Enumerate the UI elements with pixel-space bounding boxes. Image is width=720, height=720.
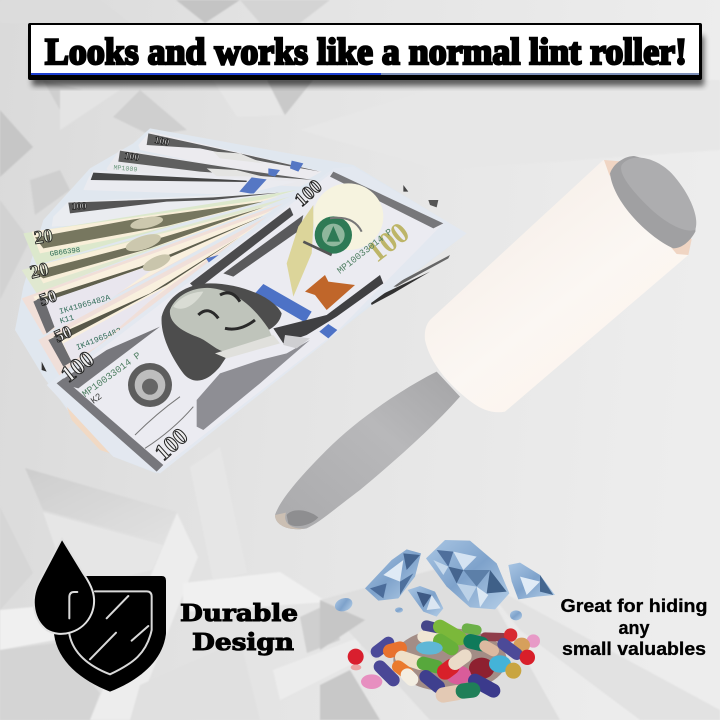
lint roller <box>275 156 696 529</box>
large diamond <box>426 540 509 609</box>
$50 bill 2: 50 <box>51 322 75 346</box>
back $100 bill 4 <box>52 192 293 227</box>
coat <box>197 340 310 430</box>
title banner <box>28 23 704 86</box>
$50 bill 2 <box>38 217 267 377</box>
back $100 bill 4: 100 <box>72 201 87 212</box>
caption: great for hiding any small valuables <box>560 596 708 659</box>
paper stack behind the bills <box>15 128 467 473</box>
shield <box>54 576 166 692</box>
caption: great for hiding any small valuables: any <box>618 618 650 638</box>
$20 bill 1: 20 <box>32 225 54 249</box>
label: durable design <box>180 600 298 656</box>
$20 bill 2: 20 <box>28 259 51 284</box>
label: durable design: Durable <box>180 600 298 627</box>
left diamond <box>365 549 421 601</box>
sticky paper roll <box>425 160 690 412</box>
back $100 bill 2: 100 <box>124 151 140 164</box>
orange emblem <box>305 275 355 310</box>
portrait of Franklin <box>162 275 383 430</box>
roll inner rim <box>604 160 692 255</box>
$50 bill 1: 50 <box>37 286 59 310</box>
back $100 bill 2: MP1009 <box>113 163 138 173</box>
back $100 bill 3 <box>83 170 297 195</box>
watermark and feather <box>313 183 383 250</box>
gold numeral: 100 <box>361 217 416 269</box>
$50 bill 1: K11 <box>59 314 76 326</box>
title text: Looks and works like a normal lint roller! <box>45 32 687 73</box>
back $100 bill 2 <box>107 149 313 187</box>
facial features <box>198 293 255 329</box>
icon: water drop on shield <box>34 538 166 692</box>
main $100 bill: MP10033014 P <box>80 350 143 400</box>
back $100 bill 1: 100 <box>153 135 170 149</box>
main $100 bill: 100 <box>291 176 327 211</box>
back $100 bill 1 <box>138 132 322 183</box>
hair <box>162 283 282 381</box>
drop <box>34 538 94 634</box>
caption: great for hiding any small valuables: Great for hiding <box>560 596 708 616</box>
grey end cap <box>610 156 696 248</box>
roller handle <box>275 372 460 529</box>
treasury seal <box>128 363 172 407</box>
small middle diamond <box>408 586 443 617</box>
hand <box>283 335 310 348</box>
main $100 bill <box>47 167 467 473</box>
$20 bill 1: GB66398 <box>49 247 81 259</box>
$20 bill 1 <box>23 190 297 265</box>
dark top band <box>57 327 160 388</box>
green seal <box>315 216 352 254</box>
$50 bill 1: IK41965482A <box>58 294 112 317</box>
corner numerals: 100 <box>56 346 100 388</box>
fan of banknotes <box>15 128 467 473</box>
label: durable design: Design <box>192 629 294 656</box>
$20 bill 2 <box>22 197 290 293</box>
face <box>170 288 273 352</box>
caption: great for hiding any small valuables: small valuables <box>562 639 706 659</box>
$50 bill 1 <box>22 203 283 335</box>
right diamond <box>508 563 555 599</box>
diamonds <box>333 540 555 620</box>
main $100 bill: 100 <box>150 423 193 466</box>
handle loop <box>287 510 318 526</box>
$50 bill 2: IK41965482 <box>75 326 123 353</box>
signatures <box>135 397 193 448</box>
valuables: diamonds and pills <box>333 540 555 695</box>
serial number: MP10033014 P <box>335 226 395 276</box>
collar <box>215 335 280 358</box>
pills <box>348 626 540 695</box>
main $100 bill: K2 <box>89 391 104 406</box>
lapel strip <box>273 275 383 343</box>
tiny diamonds <box>333 596 354 614</box>
blue security ribbon <box>255 284 312 322</box>
